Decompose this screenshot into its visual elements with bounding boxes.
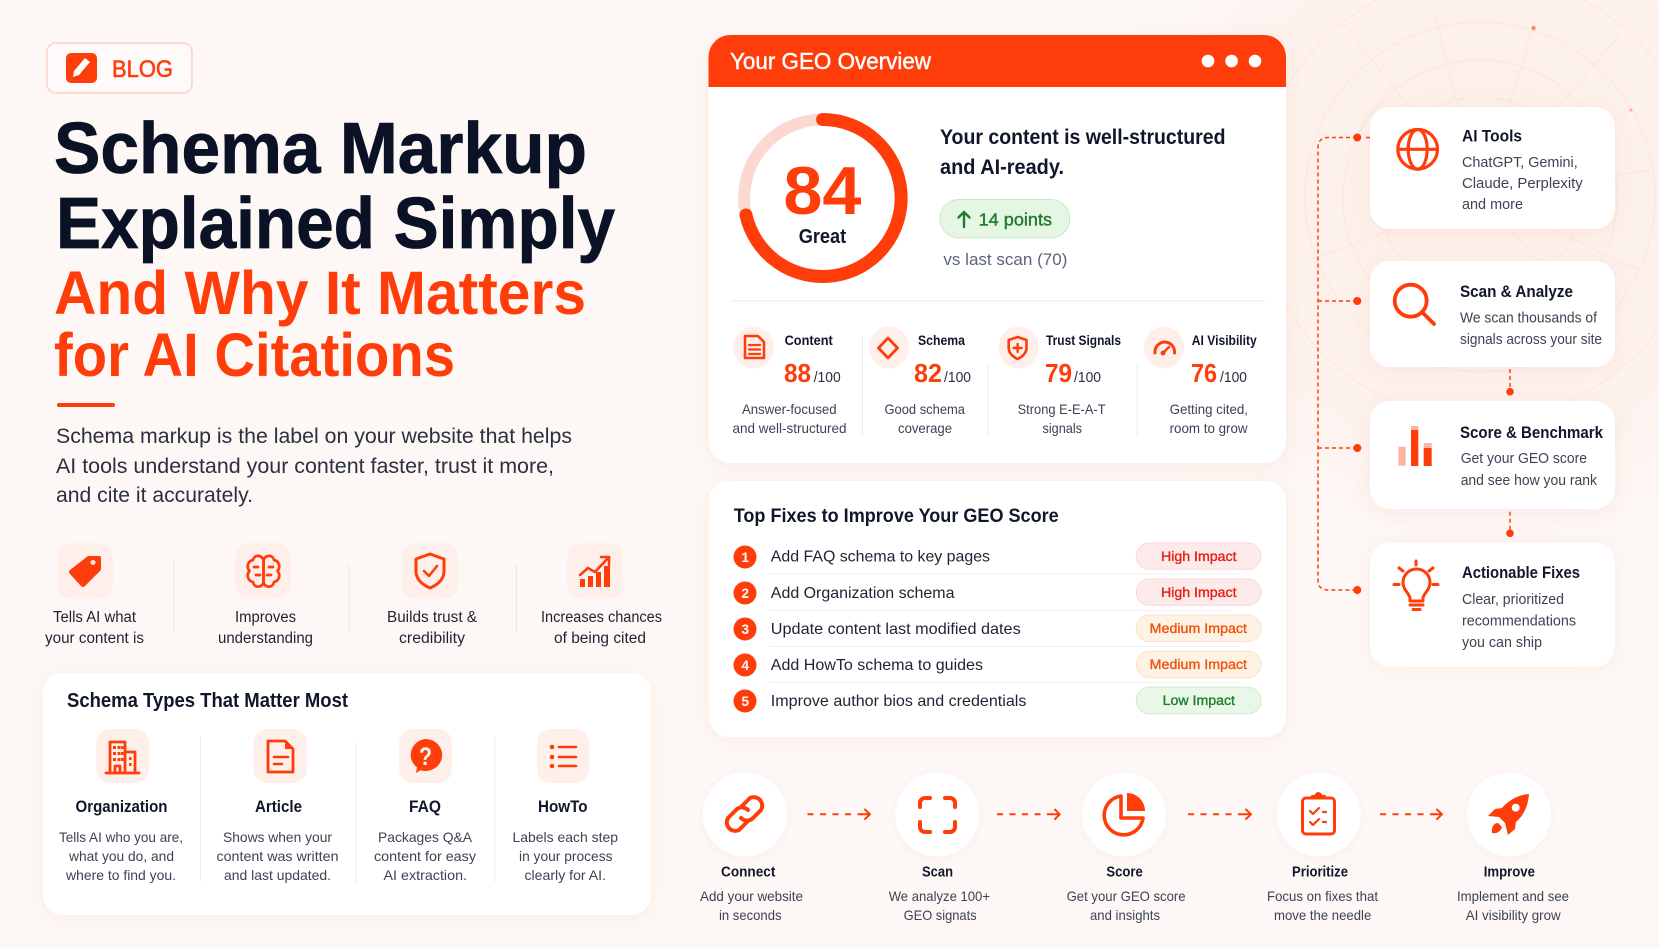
step: Score: Get your GEO score [1067,888,1186,904]
intro paragraph: AI tools understand your content faster, trust it more, [56,455,554,478]
icon: link [727,797,762,831]
benefit: tells AI what your content is: Tells AI what [53,609,137,626]
fix 4: Medium Impact [1150,657,1247,672]
benefit: improves understanding [218,543,313,647]
icon: question bubble [399,729,452,783]
icon: document [254,729,307,783]
icon: tag [57,543,113,599]
benefit: improves understanding: understanding [218,630,313,647]
metric: Content: Content [785,333,833,348]
fix 5: Improve author bios and credentials [771,693,1026,710]
icon: content document [733,326,774,368]
title [54,109,615,389]
metric: AI Visibility: room to grow [1170,420,1248,436]
card: Actionable Fixes: you can ship [1462,635,1542,651]
metric: Schema [869,326,971,436]
card: Actionable Fixes [1370,543,1615,667]
benefit: builds trust and credibility: credibility [399,630,465,647]
schema type: Article: Article [255,798,302,816]
fix 3 [734,615,1261,642]
fix 1: 1 [742,550,750,565]
fix 2: Add Organization schema [771,585,955,602]
schema type: HowTo: HowTo [538,798,588,816]
card: Scan and Analyze: We scan thousands of [1460,311,1598,327]
fix 1: Add FAQ schema to key pages [771,549,990,566]
fix 5: Low Impact [1163,693,1235,708]
arrow [808,810,870,819]
fix 4: 4 [742,658,750,673]
arrow [1380,810,1442,819]
fix 3: Update content last modified dates [771,621,1021,638]
metric: AI Visibility: 76 [1191,358,1217,388]
step: Connect: Add your website [700,888,803,904]
fix 2 [734,579,1261,605]
metric: Schema: coverage [898,420,952,436]
fix 2: High Impact [1161,585,1237,600]
benefit: increases chances of being cited [541,543,662,647]
icon: magnifier [1395,285,1434,324]
card: AI Tools: ChatGPT, Gemini, [1462,155,1578,171]
card: AI Tools: and more [1462,197,1523,213]
metric: Schema: Good schema [884,401,965,417]
connector: dashed tree [1318,134,1370,594]
score summary: Your content is well-structured [940,126,1226,149]
step: Connect [700,772,803,923]
icon: scan frame [920,798,955,832]
step: Improve [1457,772,1569,923]
metric: Trust Signals: /100 [1074,369,1101,386]
metric: Trust Signals: Trust Signals [1046,333,1121,348]
schema type: HowTo: clearly for AI. [524,867,606,883]
icon: diamond [869,326,909,368]
schema type: Organization: what you do, and [68,848,174,864]
title: Schema Markup [54,109,587,189]
schema type: Organization [59,729,183,883]
fix 2: 2 [742,586,749,601]
card: Score and Benchmark [1370,401,1615,509]
score summary [940,126,1226,269]
step: Improve: Implement and see [1457,888,1569,904]
icon: list [537,729,589,783]
step: Improve: AI visibility grow [1466,907,1562,923]
step: Scan: We analyze 100+ [889,888,990,904]
card: Score and Benchmark: Get your GEO score [1461,451,1587,467]
card: Scan and Analyze: signals across your site [1460,332,1602,348]
icon: shield [998,326,1038,368]
step: Improve: Improve [1484,865,1535,881]
fix 5: 5 [742,694,750,709]
icon: question bubble: ? [419,743,432,771]
connector: card 2 to card 3 [1506,369,1514,396]
step: Scan: Scan [922,865,953,881]
metric: Content: 88 [784,358,811,388]
benefit: increases chances of being cited: Increases chances [541,609,662,626]
step: Prioritize [1267,772,1378,923]
metric: Trust Signals: signals [1042,420,1082,436]
pill: 14 points: 14 points [979,210,1052,230]
step: Score [1067,772,1186,923]
badge: BLOG: BLOG [112,56,173,83]
icon: building [96,729,149,783]
score gauge: Great [799,226,847,248]
schema type: Organization: Organization [76,798,168,816]
step: Prioritize: Focus on fixes that [1267,888,1378,904]
header bar: Your GEO Overview [730,48,931,74]
step: Score: Score [1106,865,1143,881]
icon: pie chart [1104,793,1145,835]
benefit: builds trust and credibility [387,543,478,647]
step: Connect: in seconds [719,907,782,923]
score summary: vs last scan (70) [943,250,1067,269]
icon: globe [1398,130,1438,169]
schema type: FAQ: content for easy [374,848,476,864]
step: Scan [889,772,990,923]
step: Prioritize: Prioritize [1292,865,1348,881]
schema type: HowTo: in your process [519,848,612,864]
benefit: tells AI what your content is [45,543,144,647]
schema type: Article: and last updated. [224,867,331,883]
fix 4: Add HowTo schema to guides [771,657,983,674]
metric: Content: Answer-focused [742,401,837,417]
connector: card 3 to card 4 [1506,512,1514,537]
step: Connect: Connect [721,865,776,881]
step: Score: and insights [1090,907,1160,923]
card: Actionable Fixes: Clear, prioritized [1462,592,1564,608]
icon: brain [235,543,291,599]
panel: schema types [43,673,651,915]
metric: AI Visibility: AI Visibility [1192,333,1257,348]
card: Score and Benchmark: and see how you rank [1461,473,1598,489]
card: Scan and Analyze: Scan & Analyze [1460,282,1573,301]
card: Actionable Fixes: recommendations [1462,614,1576,630]
step: Prioritize: move the needle [1274,907,1371,923]
schema type: FAQ: Packages Q&A [378,829,473,845]
score gauge [744,119,901,276]
fix 1: High Impact [1161,549,1237,564]
arrow [997,810,1060,819]
benefit: increases chances of being cited: of being cited [554,630,646,647]
metric: AI Visibility [1144,326,1257,436]
icon: pencil [66,53,97,83]
icon: shield check [402,543,458,599]
schema type: HowTo: Labels each step [512,829,618,845]
metric: Trust Signals: Strong E-E-A-T [1018,401,1106,417]
schema type: Organization: where to find you. [65,867,176,883]
fix 5 [734,687,1261,714]
schema type: Organization: Tells AI who you are, [59,829,183,845]
metric: Content [732,326,846,436]
metric: Schema: Schema [918,333,965,348]
intro paragraph [56,425,572,507]
card: AI Tools [1370,107,1615,229]
fix 3: Medium Impact [1150,621,1247,636]
schema type: Article: Shows when your [223,829,332,845]
benefit: improves understanding: Improves [235,609,296,626]
panel: top fixes [709,481,1286,737]
intro paragraph: Schema markup is the label on your website that helps [56,425,572,448]
icon: light bulb [1394,561,1438,610]
card: Score and Benchmark: Score & Benchmark [1460,423,1603,442]
title: And Why It Matters [54,259,586,327]
intro paragraph: and cite it accurately. [56,484,253,507]
card: AI Tools: AI Tools [1462,127,1522,146]
icon: rocket [1488,794,1529,835]
schema type: Article [216,729,338,883]
title: for AI Citations [54,321,455,389]
arrow [1188,810,1251,819]
header bar [708,35,1286,87]
card: AI Tools: Claude, Perplexity [1462,176,1583,192]
benefit: tells AI what your content is: your content is [45,630,144,647]
metric: AI Visibility: /100 [1220,369,1247,386]
metric: Trust Signals [998,326,1121,436]
score gauge: 84 [783,153,862,229]
schema type: FAQ: AI extraction. [384,867,467,883]
panel: schema types: Schema Types That Matter Most [67,690,348,712]
schema type: Article: content was written [216,848,338,864]
fix 1 [734,543,1261,569]
fix 4 [734,651,1261,678]
metric: Trust Signals: 79 [1045,358,1072,388]
icon: bar chart [1398,426,1432,466]
schema type: FAQ [374,729,476,883]
metric: Schema: 82 [914,358,942,388]
card: Scan and Analyze [1370,261,1615,367]
metric: Schema: /100 [944,369,971,386]
card: Actionable Fixes: Actionable Fixes [1462,563,1580,582]
icon: clipboard checklist [1302,793,1334,834]
metric: Content: and well-structured [732,420,846,436]
schema type: FAQ: FAQ [409,798,441,816]
pill: 14 points [940,200,1070,238]
metric: AI Visibility: Getting cited, [1170,401,1248,417]
score summary: and AI-ready. [940,156,1064,179]
fix 3: 3 [742,622,750,637]
panel: top fixes: Top Fixes to Improve Your GEO Score [734,505,1059,527]
panel: GEO overview [708,35,1286,463]
step: Scan: GEO signats [904,907,977,923]
metric: Content: /100 [814,369,841,386]
icon: growth chart [567,543,623,599]
benefit: builds trust and credibility: Builds trust & [387,609,478,626]
icon: speedometer [1144,326,1184,368]
schema type: HowTo [512,729,618,883]
badge: BLOG [47,43,192,93]
title: Explained Simply [56,184,615,264]
